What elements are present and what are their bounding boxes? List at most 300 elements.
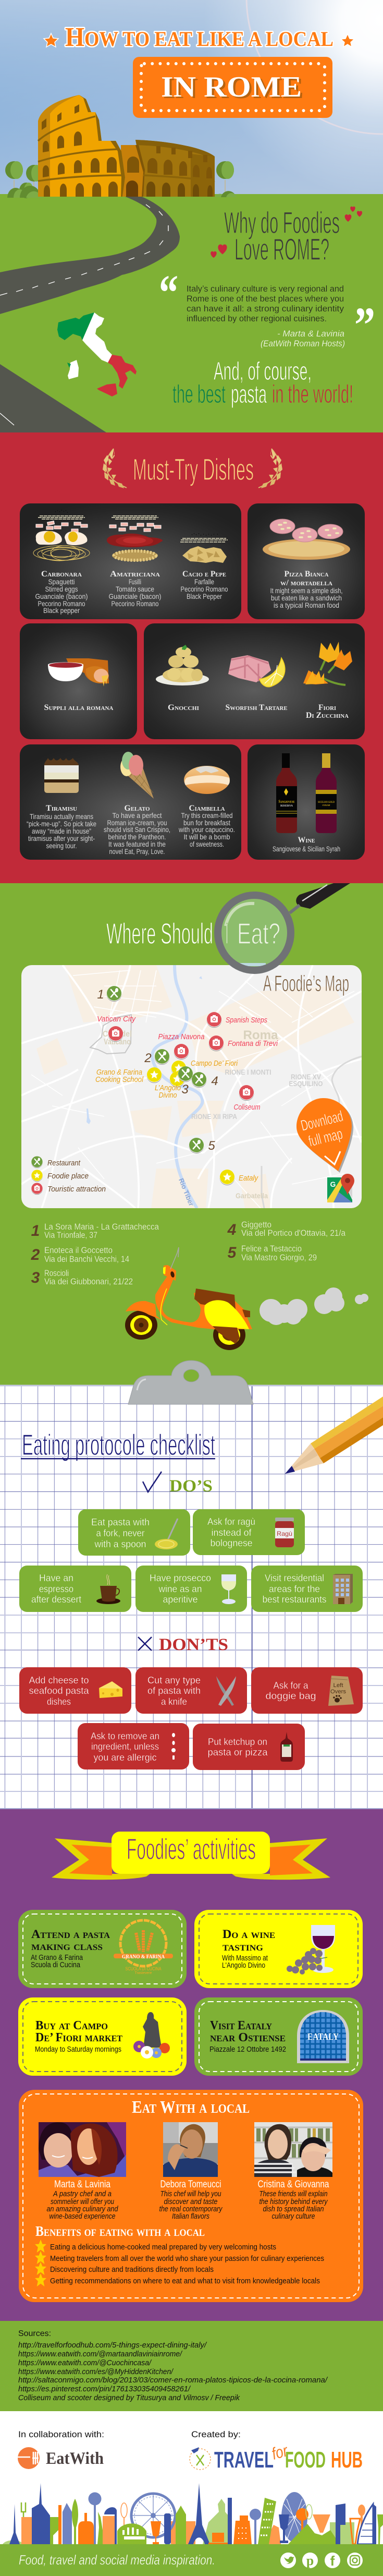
card: pasta making class: Scuola di Cucina: [31, 1960, 81, 1969]
hosts: an amazing culinary and: [47, 2205, 118, 2213]
photo: Debora Tomeucci: [163, 2122, 218, 2177]
restaurant list: Via Mastro Giorgio, 29: [241, 1253, 317, 1262]
icon: Eataly window: [297, 2010, 349, 2063]
chalkboard: carbonara, amatriciana, cacio e pepe: Fusilli: [129, 577, 141, 586]
illustration: city and kitchen skyline: [3, 2483, 383, 2544]
card: Campo de' Fiori market: Buy at Campo: [35, 2019, 108, 2032]
icon: wine glass and grapes: [287, 1925, 335, 1975]
grid paper lines: [0, 1385, 383, 1809]
do: prosecco: [135, 1566, 247, 1612]
card: Eataly: [194, 1997, 363, 2076]
banner: [52, 1832, 330, 1880]
legend: Foodie place: [47, 1172, 89, 1181]
lens: [219, 896, 290, 969]
heading: must-try dishes with laurels: [103, 449, 282, 488]
card: Campo de' Fiori market: [18, 1997, 187, 2076]
quote: (EatWith Roman Hosts): [261, 339, 345, 348]
map markers and labels: Grano & Farina: [96, 1068, 142, 1077]
panel: checklist paper: [0, 1361, 383, 1809]
social icons: f: [330, 2553, 335, 2569]
logo: Travel for Food Hub: TRAVEL: [214, 2447, 274, 2473]
heading: where should I eat: I: [226, 917, 228, 950]
panel: green hillside background: [0, 194, 383, 432]
panel: sources: Sources:: [18, 2329, 51, 2338]
panel: sources: [0, 2321, 383, 2411]
map markers and labels: Spanish Steps: [226, 1016, 267, 1025]
card: pasta making class: making class: [31, 1940, 103, 1953]
chalkboard: pizza bianca: Pizza Bianca: [285, 570, 329, 579]
chalkboard: carbonara, amatriciana, cacio e pepe: Black pepper: [43, 606, 80, 615]
map markers and labels: 2: [144, 1051, 152, 1065]
smoke: [260, 1287, 368, 1325]
map markers and labels: Coliseum: [233, 1103, 261, 1112]
restaurant list: Via Trionfale, 37: [44, 1230, 97, 1240]
star left: [44, 33, 58, 47]
chalkboard: tiramisu, gelato, ciambella: seeing tour.: [46, 841, 77, 850]
dont: doggie bag: Ask for a: [273, 1680, 308, 1691]
dont: cheese: seafood pasta: [29, 1686, 90, 1696]
do: fork: with a spoon: [94, 1539, 146, 1549]
chalkboard: tiramisu, gelato, ciambella: novel Eat, Pray, Love.: [109, 847, 165, 856]
quote: [159, 264, 375, 353]
restaurant list: 1: [31, 1222, 40, 1239]
callout: download full map pin: [296, 1098, 353, 1173]
chalkboard: tiramisu, gelato, ciambella: Tiramisu: [46, 804, 77, 813]
card: wine tasting: tasting: [223, 1940, 264, 1953]
icon: ragu jar: Ragù: [277, 1530, 292, 1537]
road: [0, 197, 180, 432]
callout: download full map pin: full map: [307, 1126, 344, 1150]
donts heading: DON’TS: [159, 1635, 228, 1654]
map: Vaticano: [104, 1038, 131, 1046]
footer: [0, 2544, 383, 2576]
footer: Food, travel and social media inspiration.: [19, 2552, 215, 2568]
restaurant list: Giggetto: [241, 1220, 271, 1230]
restaurant list: La Sora Maria - La Grattachecca: [44, 1222, 159, 1232]
quote: Italy’s culinary culture is very regional and: [187, 284, 344, 294]
wheels: [125, 1310, 157, 1340]
do: fork: a fork, never: [96, 1528, 145, 1538]
chalkboard: tiramisu, gelato, ciambella: with your capuccino.: [178, 825, 235, 834]
restaurant list: Via dei Banchi Vecchi, 14: [44, 1254, 129, 1264]
card: pasta making class: [18, 1910, 187, 1988]
badge: in Rome: IN ROME: [161, 71, 302, 103]
map markers and labels: 1: [97, 988, 104, 1002]
legend: [31, 1156, 106, 1195]
dont: cheese: [19, 1667, 131, 1714]
icon: wine bottle Sangiovese: RISERVA: [280, 805, 293, 808]
icon: suppli and sauce bowl: [48, 658, 109, 687]
illustration: Italy map in flag colours: [57, 312, 137, 396]
callout: download full map pin: Download: [299, 1108, 344, 1135]
map: Vatican border: [90, 1015, 131, 1054]
map: place names: Roma: [243, 1028, 278, 1042]
map markers and labels: Divino: [158, 1091, 177, 1100]
panel: must-try dishes: [0, 432, 383, 883]
panel: sources: https://www.eatwith.com/es/@MyHiddenKitchen/: [18, 2367, 174, 2376]
social icons: p: [306, 2553, 314, 2568]
restaurant list: 3: [31, 1269, 40, 1286]
map: RIONE XII RIPA: [191, 1112, 237, 1121]
map markers and labels: Eataly: [239, 1174, 258, 1183]
map markers and labels: 5: [208, 1139, 215, 1153]
chalkboard: tiramisu, gelato, ciambella: [20, 744, 241, 860]
heading: eating protocole checklist: Eating protocole checklist: [22, 1428, 215, 1462]
chalkboard: tiramisu, gelato, ciambella: behind the Pantheon.: [108, 833, 166, 841]
icon: Google Maps: [327, 1174, 354, 1202]
closing statement: And, of course,: [214, 357, 312, 386]
restaurant list: Via dei Giubbonari, 21/22: [44, 1277, 133, 1286]
card: wine tasting: Do a wine: [223, 1928, 275, 1941]
ring: [218, 895, 291, 970]
panel: credits: [0, 2411, 383, 2545]
restaurant list: Roscioli: [44, 1268, 69, 1278]
icon: pizza with mortadella: [263, 519, 350, 560]
icon: gelato: [120, 752, 154, 799]
card: Campo de' Fiori market: De’ Fiori market: [35, 2031, 123, 2044]
hosts: This chef will help you: [160, 2189, 221, 2198]
do: fork: [78, 1509, 190, 1556]
quote: ”: [354, 297, 375, 353]
panel: sources: https://www.eatwith.com/@Cuochincasa/: [18, 2358, 152, 2367]
card: Eataly: Piazzale 12 Ottobre 1492: [209, 2045, 286, 2054]
chalkboard: carbonara, amatriciana, cacio e pepe: [20, 503, 241, 619]
logo: Travel for Food Hub: [190, 2441, 363, 2473]
heading: where should I eat: Where Should: [106, 917, 213, 950]
benefits list: Discovering culture and traditions directly from locals: [50, 2265, 214, 2274]
chalkboard: tiramisu, gelato, ciambella: Tiramisu actually means: [30, 812, 93, 821]
icon: ragu jar: [275, 1518, 294, 1547]
chalkboard: tiramisu, gelato, ciambella: To have a perfect: [113, 811, 162, 820]
closing statement: the best: [172, 380, 226, 408]
dont: remove ingredient: [78, 1723, 189, 1770]
icon: wine bottle Syrah: SICILIAN GOLD: [318, 801, 335, 804]
chalkboard: suppli: [20, 623, 137, 739]
hosts: Marta & Lavinia: [54, 2179, 110, 2190]
dont: doggie bag: [251, 1667, 363, 1714]
dont: ketchup: [193, 1724, 305, 1770]
chalkboard: tiramisu, gelato, ciambella: of sweetness.: [190, 840, 224, 848]
chalkboard: carbonara, amatriciana, cacio e pepe: Guanciale (bacon): [108, 592, 162, 600]
dont: knife: [135, 1667, 247, 1714]
panel: eat with a local: Eat With a local: [132, 2098, 250, 2117]
chalkboard: tiramisu, gelato, ciambella: It was featured in the: [108, 840, 166, 848]
clip: [128, 1361, 253, 1404]
chalkboard: carbonara, amatriciana, cacio e pepe: Carbonara: [41, 570, 82, 579]
icon: paper bag: Overs: [330, 1689, 347, 1695]
chalkboard: tiramisu, gelato, ciambella: bun for breakfast: [183, 818, 230, 827]
icon: zucchini flowers: [303, 642, 352, 685]
do: espresso: after dessert: [31, 1594, 81, 1605]
restaurant list: Felice a Testaccio: [241, 1244, 302, 1254]
quote: can have it all: a strong culinary identity: [187, 304, 344, 314]
chalkboard: carbonara, amatriciana, cacio e pepe: Pecorino Romano: [38, 599, 85, 608]
map: Rio Tiber: [177, 1177, 195, 1207]
panel: sources: Colliseum and scooter designed by Titusurya and Vilmosv / Freepik: [18, 2393, 240, 2402]
chalkboard: carbonara, amatriciana, cacio e pepe: Farfalle: [194, 577, 214, 586]
map: Città del: [103, 1030, 132, 1039]
dont: knife: of pasta with: [147, 1686, 201, 1696]
panel: eat with a local: [19, 2090, 363, 2302]
card: pasta making class: At Grano & Farina: [31, 1953, 83, 1962]
map markers and labels: 4: [211, 1074, 218, 1088]
closing statement: pasta: [231, 380, 267, 408]
chalkboard: pizza bianca: but eaten like a sandwich: [271, 594, 342, 602]
do: prosecco: Have prosecco: [150, 1573, 211, 1583]
chalkboard: pizza bianca: w/ mortadella: [280, 579, 332, 587]
map: Garbatella: [236, 1191, 268, 1200]
dont: knife: a knife: [161, 1696, 187, 1707]
icon: Google Maps: G: [330, 1180, 336, 1188]
hosts: the history behind every: [260, 2197, 328, 2206]
panel: sources: http://travelforfoodhub.com/5-things-expect-dining-italy/: [18, 2341, 207, 2350]
handle: [296, 883, 350, 909]
star right: [341, 34, 354, 47]
do: residential areas: best restaurants: [263, 1594, 326, 1605]
map markers and labels: Campo De’ Fiori: [191, 1059, 238, 1068]
logo: Grano e Farina: [114, 1920, 173, 1975]
chalkboard: carbonara, amatriciana, cacio e pepe: Stirred eggs: [45, 585, 78, 593]
map: highway: [262, 1056, 362, 1208]
map: built-up areas: [36, 965, 354, 1208]
chalkboard: gnocchi, tartare, fiori di zucchina: Fiori: [318, 703, 336, 712]
hosts: [47, 2179, 329, 2221]
title text: HOW TO EAT LIKE A LOCAL: [65, 22, 333, 52]
card: pasta making class: Attend a pasta: [31, 1928, 110, 1941]
dont: ketchup: Put ketchup on: [208, 1737, 267, 1747]
icon: statue and flowers: [133, 2012, 170, 2059]
benefits list: Meeting travelers from all over the world who share your passion for culinary experiences: [50, 2254, 324, 2263]
icon: wine glass: [221, 1574, 236, 1604]
quote: “: [159, 264, 178, 320]
chalkboard: tiramisu, gelato, ciambella: It will be a bomb: [183, 833, 230, 841]
icon: wine bottle Syrah: SYRAH: [322, 804, 330, 806]
heading: where should I eat: Eat?: [237, 917, 280, 950]
icon: carbonara ingredients: [33, 510, 90, 561]
icon: wine bottle Syrah: [316, 753, 337, 833]
icon: ciambella: [184, 766, 230, 794]
panel: sky background: [0, 0, 383, 198]
chalkboard: tiramisu, gelato, ciambella: tiramisus after your sight-: [28, 834, 95, 842]
chalkboard: tiramisu, gelato, ciambella: Gelato: [124, 804, 150, 813]
chalkboard: gnocchi, tartare, fiori di zucchina: [144, 623, 365, 739]
illustration: Colosseum with trees: [5, 95, 237, 198]
chalkboard: gnocchi, tartare, fiori di zucchina: Di Zucchina: [306, 711, 349, 720]
chalkboard: pizza bianca: [248, 503, 365, 619]
chalkboard: tiramisu, gelato, ciambella: “pick-me-up”. So pick take: [27, 820, 96, 828]
heading: must-try dishes with laurels: Must-Try Dishes: [133, 453, 254, 487]
card: wine tasting: With Massimo at: [222, 1954, 268, 1963]
benefits list: Getting recommendations on where to eat and what to visit from knowledgeable locals: [50, 2277, 320, 2285]
hosts: discover and taste: [164, 2197, 218, 2206]
map markers and labels: Piazza Navona: [158, 1032, 204, 1041]
chalkboard: pizza bianca: is a typical Roman food: [274, 601, 339, 609]
chalkboard: carbonara, amatriciana, cacio e pepe: Spaguetti: [48, 577, 75, 586]
map: [21, 965, 362, 1208]
card: Campo de' Fiori market: Monday to Saturday mornings: [35, 2045, 121, 2054]
logo: EatWith: EatWith: [46, 2449, 104, 2468]
map markers and labels: Cooking School: [95, 1075, 144, 1084]
handlebar and mirror: [164, 1265, 176, 1281]
logo: Grano e Farina: SCUOLA DI CUCINA: [125, 1966, 162, 1971]
legend: Touristic attraction: [47, 1185, 106, 1194]
icon: amatriciana ingredients: [107, 516, 163, 561]
restaurant list: 4: [227, 1221, 237, 1238]
do: residential areas: areas for the: [269, 1584, 320, 1594]
chalkboard: gnocchi, tartare, fiori di zucchina: Gnocchi: [168, 703, 199, 712]
panel: credits: Created by:: [191, 2429, 241, 2439]
chalkboard: carbonara, amatriciana, cacio e pepe: Tomato sauce: [116, 585, 154, 593]
hosts: A pastry chef and a: [53, 2189, 112, 2198]
hosts: Italian flavors: [172, 2212, 209, 2221]
restaurant list: [31, 1220, 345, 1286]
card: wine tasting: [194, 1910, 363, 1988]
hosts: wine-based experience: [49, 2212, 116, 2221]
dont: remove ingredient: ingredient, unless: [91, 1741, 159, 1752]
chalkboard: wine: [248, 744, 365, 860]
panel: where should I eat: [0, 883, 383, 1385]
restaurant list: Enoteca il Goccetto: [44, 1245, 113, 1255]
do: residential areas: Visit residential: [265, 1573, 324, 1583]
card: wine tasting: L'Angolo Divino: [222, 1961, 265, 1970]
panel: foodies' activities: [0, 1809, 383, 2321]
chalkboard: suppli: Suppli alla romana: [44, 703, 114, 712]
icon: tiramisu: [44, 758, 79, 793]
trees and bushes: [5, 161, 237, 198]
chalkboard: carbonara, amatriciana, cacio e pepe: Amatriciana: [110, 570, 160, 579]
icon: Eataly window: EATALY: [307, 2031, 339, 2042]
map markers and labels: L’Angolo: [155, 1084, 181, 1092]
dos heading: [143, 1472, 213, 1496]
illustration: scooter with smoke: [125, 1247, 368, 1350]
chalkboard: tiramisu, gelato, ciambella: Roman ice-cream, you: [107, 818, 167, 827]
logo: EatWith: [18, 2447, 104, 2469]
logo: Grano e Farina: GRANO & FARINA: [122, 1954, 165, 1960]
do: espresso: espresso: [39, 1584, 73, 1594]
badge: in Rome: [133, 57, 332, 118]
do: ragu: instead of: [212, 1527, 252, 1538]
map markers and labels: [95, 986, 278, 1185]
hosts: dish to spread Italian: [263, 2205, 324, 2213]
do: espresso: [19, 1566, 131, 1612]
quote: Rome is one of the best places where you: [187, 294, 344, 304]
panel: credits: In collaboration with:: [18, 2429, 104, 2439]
hosts: the real contemporary: [159, 2205, 223, 2213]
hosts: Debora Tomeucci: [160, 2179, 221, 2190]
banner: Foodies’ activities: [127, 1833, 256, 1866]
panel: sources: https://www.eatwith.com/@martaandlaviniainrome/: [18, 2350, 183, 2358]
magnifying glass with heading: [106, 883, 350, 970]
quote: - Marta & Lavinia: [277, 329, 344, 339]
icon: fork with pasta: [155, 1519, 178, 1549]
chalkboard: gnocchi, tartare, fiori di zucchina: Sworfish Tartare: [225, 703, 288, 712]
chalkboard: tiramisu, gelato, ciambella: Ciambella: [189, 804, 225, 813]
panel: sources: http://saltaconmigo.com/blog/2013/03/comer-en-roma-platos-tipicos-de-la-cocina-romana/: [18, 2376, 328, 2385]
card: Eataly: Visit Eataly: [210, 2019, 272, 2032]
icon: apartment building: [333, 1574, 353, 1604]
icon: ingredient symbols: [171, 1733, 176, 1760]
map markers and labels: 3: [181, 1082, 189, 1097]
hosts: sommelier will offer you: [51, 2197, 115, 2206]
dont: knife: Cut any type: [147, 1675, 201, 1686]
icon: ketchup bottle: [280, 1732, 293, 1762]
restaurant list: 5: [228, 1244, 237, 1261]
chalkboard: carbonara, amatriciana, cacio e pepe: Pecorino Romano: [180, 585, 228, 593]
logo: Travel for Food Hub: for: [269, 2441, 290, 2463]
panel: sources: https://es.pinterest.com/pin/176133035409458261/: [18, 2385, 191, 2393]
icon: paper bag: [328, 1676, 354, 1706]
social icons: [280, 2553, 363, 2569]
do: ragu: Ask for ragù: [207, 1516, 255, 1527]
do: fork: Eat pasta with: [91, 1517, 150, 1527]
photo: Cristina and Giovanna: [254, 2122, 332, 2177]
map: ESQUILINO: [289, 1079, 323, 1088]
closing statement: [172, 357, 353, 408]
map markers and labels: Fontana di Trevi: [228, 1039, 278, 1048]
heading: why do foodies love Rome: [211, 206, 362, 267]
chalkboard: carbonara, amatriciana, cacio e pepe: Pecorino Romano: [112, 599, 159, 608]
dont: remove ingredient: Ask to remove an: [91, 1731, 159, 1741]
icon: swordfish tartare with lemon: [228, 655, 285, 687]
restaurant list: Via del Portico d'Ottavia, 21/a: [241, 1228, 345, 1238]
benefits list: Eating a delicious home-cooked meal prepared by very welcoming hosts: [50, 2243, 276, 2252]
dont: remove ingredient: you are allergic: [94, 1752, 156, 1763]
body: [155, 1275, 252, 1329]
map: RIONE I MONTI: [225, 1068, 271, 1076]
legend: Restaurant: [47, 1159, 81, 1167]
chalkboard: tiramisu, gelato, ciambella: away “made in house”: [32, 827, 91, 835]
dont: cheese: Add cheese to: [29, 1675, 89, 1686]
card: Eataly: near Ostiense: [210, 2031, 286, 2044]
dos heading: DO’S: [169, 1477, 213, 1496]
hosts: These friends will explain: [260, 2189, 327, 2198]
hosts: Cristina & Giovanna: [257, 2179, 329, 2190]
chalkboard: tiramisu, gelato, ciambella: Try this cream-filled: [181, 811, 232, 820]
icon: pencil: [285, 1397, 383, 1474]
dont: cheese: dishes: [47, 1696, 71, 1707]
chalkboard: wine: Sangiovese & Sicilian Syrah: [273, 845, 340, 853]
dont: ketchup: pasta or pizza: [207, 1747, 268, 1758]
map: RIONE XV: [291, 1073, 322, 1081]
do: prosecco: aperitive: [163, 1594, 198, 1605]
logo: Grano e Farina: Trastevere: [134, 1971, 152, 1975]
icon: wine bottle Sangiovese: [276, 753, 297, 833]
do: ragu: [193, 1509, 305, 1555]
icon: gnocchi: [156, 645, 209, 685]
benefits list: Benefits of eating with a local: [35, 2223, 205, 2239]
icon: paper bag: Left: [333, 1682, 343, 1689]
restaurant list: 2: [31, 1246, 40, 1263]
dont: doggie bag: doggie bag: [266, 1691, 316, 1701]
map: river Tiber: [152, 965, 202, 1208]
icon: wine bottle Sangiovese: Sangiovese: [278, 799, 295, 804]
map: road network: [21, 965, 362, 1208]
chalkboard: carbonara, amatriciana, cacio e pepe: Black Pepper: [187, 592, 222, 600]
title: [44, 22, 354, 52]
icon: coffee cup: [96, 1574, 120, 1604]
chalkboard: pizza bianca: It might seem a simple dish,: [270, 586, 343, 595]
icon: cacio e pepe ingredients: [180, 534, 228, 563]
logo: Travel for Food Hub: HUB: [331, 2447, 363, 2473]
do: residential areas: [251, 1566, 363, 1612]
chalkboard: carbonara, amatriciana, cacio e pepe: Guanciale (bacon): [35, 592, 88, 600]
icon: cheese: [99, 1681, 122, 1698]
photo: Marta and Lavinia: [39, 2122, 126, 2177]
chalkboard: carbonara, amatriciana, cacio e pepe: Cacio e Pepe: [182, 570, 226, 579]
chalkboard: wine: Wine: [298, 836, 315, 845]
do: ragu: bolognese: [211, 1538, 252, 1548]
hosts: culinary culture: [272, 2212, 315, 2221]
